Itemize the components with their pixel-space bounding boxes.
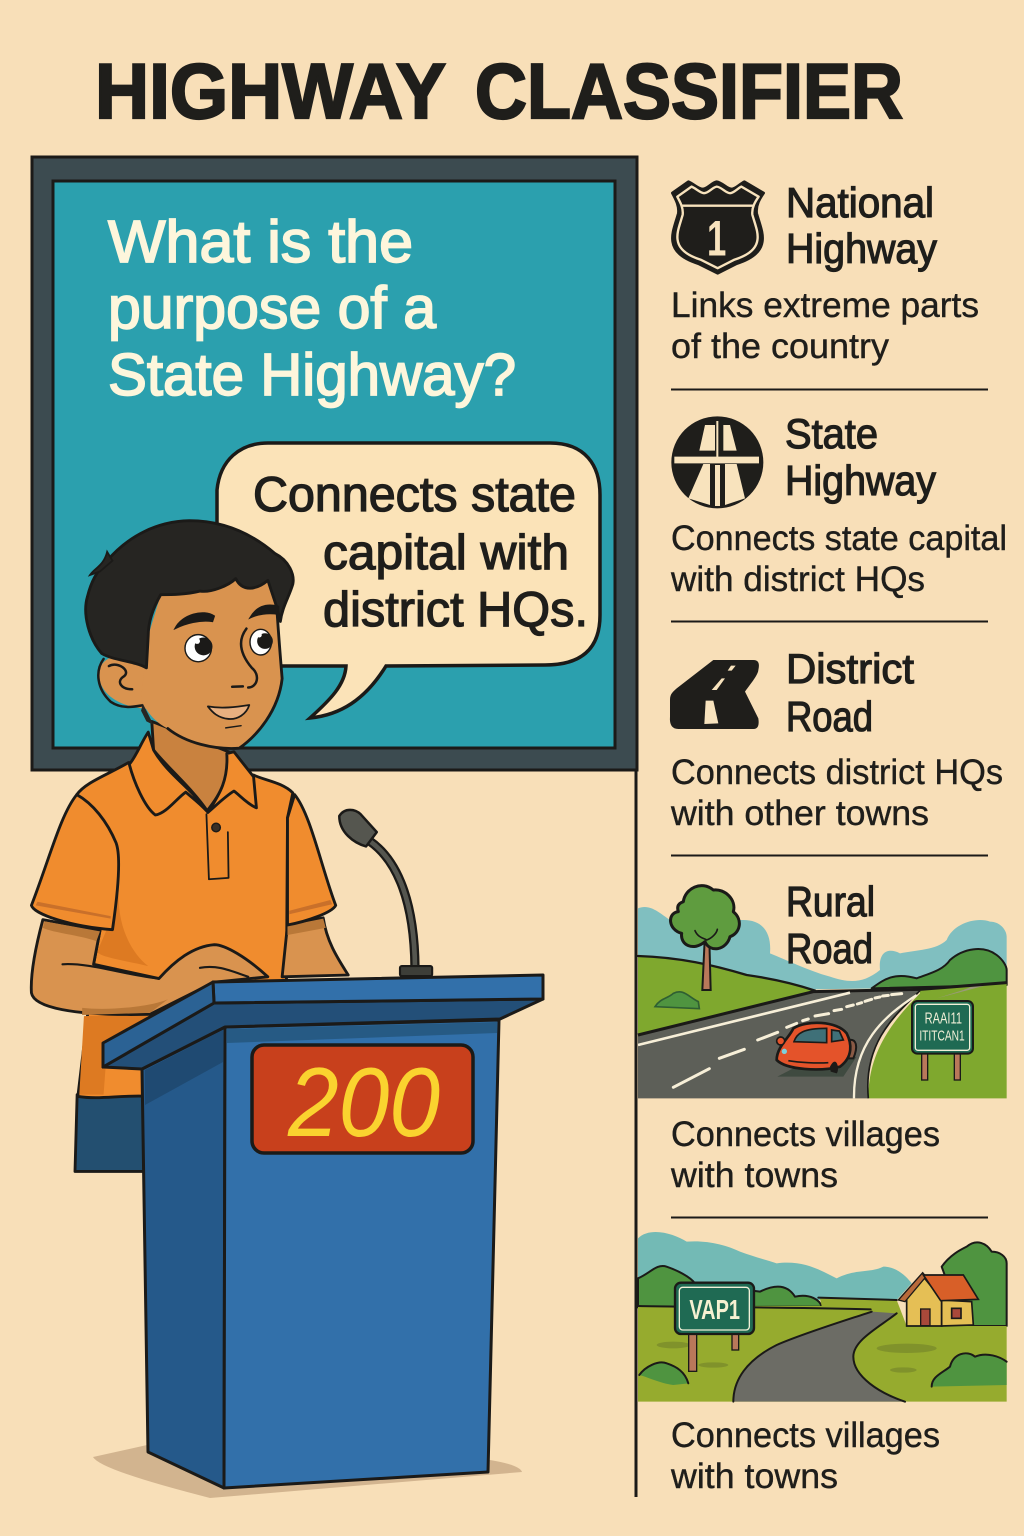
- eyes: [185, 629, 273, 662]
- illustration: village road scene: [638, 1232, 1007, 1402]
- bubble answer text: [253, 468, 588, 637]
- description: rural road: with towns: [670, 1156, 838, 1195]
- podium: [103, 975, 543, 1488]
- panel: rural road: [638, 878, 1007, 1195]
- panel: national highway: [671, 179, 979, 366]
- description: village road: with towns: [670, 1457, 838, 1496]
- heading: national highway: National: [786, 179, 934, 226]
- heading: state highway: Highway: [785, 457, 936, 504]
- description: village road: Connects villages: [671, 1416, 940, 1455]
- panel: district road: [670, 645, 1003, 833]
- question text: What is the: [108, 209, 413, 275]
- trousers: [75, 1095, 150, 1171]
- ear: [98, 656, 154, 709]
- road sign: VAP1: [689, 1294, 740, 1325]
- face: [141, 579, 282, 748]
- title: HIGHWAY: [95, 47, 446, 135]
- speech bubble: [217, 443, 600, 718]
- icon: district road: [670, 660, 759, 729]
- description: state highway: [670, 519, 1007, 599]
- gravel track: [937, 983, 993, 998]
- description: rural road: Connects villages: [671, 1115, 940, 1154]
- left hill: [638, 956, 815, 1035]
- heading: district road: [786, 645, 914, 740]
- grass smudges: [657, 1342, 937, 1373]
- title: [95, 47, 903, 135]
- collar: [129, 732, 256, 815]
- podium front face: [224, 1020, 499, 1488]
- heading: rural road: Rural: [786, 878, 875, 925]
- quiz screen panel: [32, 157, 637, 770]
- description: national highway: of the country: [671, 327, 890, 366]
- icon: national highway shield: 1: [707, 210, 726, 266]
- podium side shading: [145, 1030, 223, 1105]
- bubble answer text: Connects state: [253, 468, 576, 522]
- road: [638, 990, 920, 1098]
- road sign: [675, 1283, 754, 1371]
- heading: rural road: Road: [786, 925, 873, 972]
- bush: [655, 992, 699, 1009]
- distant hills: [638, 1232, 912, 1300]
- illustration: rural road scene: [638, 886, 1007, 1098]
- panel: village road: [638, 1232, 1007, 1496]
- shirt torso: [77, 762, 293, 1098]
- student character: [31, 521, 432, 1171]
- road sign: RAAI11: [925, 1010, 962, 1027]
- house: [898, 1273, 978, 1326]
- back bushes: [638, 1266, 822, 1307]
- icon: national highway shield: [672, 182, 764, 273]
- podium side face: [142, 1027, 225, 1488]
- heading: state highway: State: [785, 410, 878, 457]
- bubble answer text: district HQs.: [323, 583, 588, 637]
- description: district road: [670, 753, 1003, 833]
- question text: [108, 209, 516, 408]
- microphone: [339, 810, 432, 976]
- road sign: ITITCAN1: [919, 1029, 965, 1045]
- road markings: [638, 993, 917, 1098]
- clouds: [638, 907, 1007, 992]
- heading: district road: Road: [786, 693, 873, 740]
- right sleeve: [287, 795, 336, 925]
- bubble answer text: capital with: [323, 526, 569, 580]
- description: village road: [670, 1416, 940, 1496]
- neck: [152, 721, 229, 811]
- left arm: [31, 920, 268, 1015]
- podium front shading: [227, 1022, 497, 1043]
- left sleeve: [31, 795, 119, 930]
- right hills: [872, 949, 1007, 988]
- column divider: [634, 770, 638, 1497]
- eyebrows: [175, 605, 279, 629]
- road: [733, 1312, 905, 1402]
- podium underside: [103, 999, 543, 1069]
- grass: [638, 1298, 1007, 1402]
- description: national highway: Links extreme parts: [671, 286, 979, 325]
- right arm: [282, 918, 348, 977]
- nose: [232, 629, 257, 687]
- description: district road: Connects district HQs: [671, 753, 1003, 792]
- heading: rural road: [786, 878, 875, 972]
- panel: state highway: [670, 410, 1007, 599]
- car: [777, 1023, 857, 1077]
- podium shadow: [93, 1445, 522, 1498]
- heading: state highway: [785, 410, 936, 504]
- shirt placket: [206, 814, 229, 879]
- road sign: [912, 1001, 973, 1080]
- description: state highway: Connects state capital: [671, 519, 1007, 558]
- title: CLASSIFIER: [475, 47, 903, 135]
- description: district road: with other towns: [670, 794, 929, 833]
- tree: [671, 886, 739, 990]
- front bushes: [639, 1353, 1007, 1387]
- description: national highway: [671, 286, 979, 366]
- description: state highway: with district HQs: [670, 560, 925, 599]
- podium top slab: [213, 975, 543, 1003]
- right grass: [868, 983, 1007, 1098]
- icon: state highway roundel: [671, 416, 763, 508]
- heading: national highway: [786, 179, 937, 272]
- right tree mass: [942, 1242, 1007, 1326]
- question text: purpose of a: [108, 275, 436, 341]
- hair: [86, 521, 293, 725]
- mouth: [208, 705, 249, 728]
- question text: State Highway?: [108, 342, 516, 408]
- shirt shading: [79, 893, 150, 1095]
- heading: district road: District: [786, 645, 914, 692]
- score display: 200: [287, 1047, 440, 1157]
- heading: national highway: Highway: [786, 225, 937, 272]
- description: rural road: [670, 1115, 940, 1195]
